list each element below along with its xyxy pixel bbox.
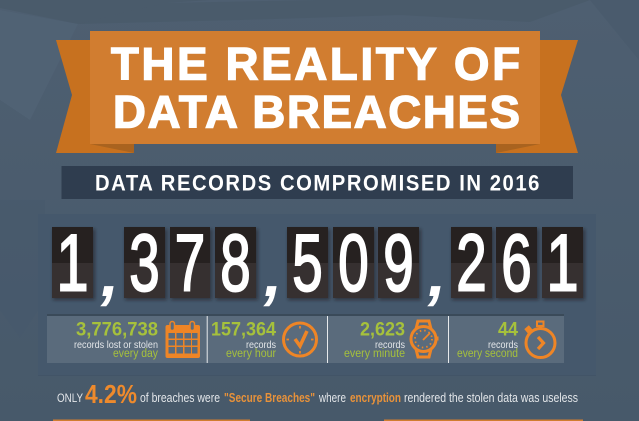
commas: ,	[100, 236, 119, 310]
subtitle bar	[62, 166, 573, 199]
bottom orange bars	[53, 420, 583, 421]
encryption statement: of breaches were	[140, 390, 220, 405]
stat: every second: 44	[498, 320, 518, 340]
digits: 1	[56, 218, 89, 308]
title	[111, 38, 520, 138]
stat: every minute: records	[375, 339, 405, 351]
stat: every second: records	[488, 339, 518, 351]
stat: every minute: every minute	[344, 348, 405, 360]
encryption statement: "Secure Breaches"	[224, 390, 315, 405]
subtitle bar: DATA RECORDS COMPROMISED IN 2016	[95, 172, 539, 196]
digit cards	[52, 227, 585, 300]
stat: every minute: 2,623	[360, 320, 405, 340]
stat: every minute	[344, 320, 405, 360]
digits: 5	[292, 218, 323, 308]
commas	[100, 236, 446, 310]
ribbon banner	[56, 31, 578, 153]
stat: every hour: 157,364	[211, 320, 276, 340]
icon: watch	[411, 321, 438, 357]
commas: ,	[263, 236, 282, 310]
encryption statement: ONLY	[57, 391, 83, 405]
digits: 6	[501, 218, 532, 308]
digits: 9	[383, 218, 414, 308]
icon: calendar	[166, 322, 200, 358]
encryption statement: rendered the stolen data was useless	[404, 390, 578, 405]
encryption statement: 4.2%	[85, 379, 137, 409]
stats band	[47, 314, 564, 363]
digits	[56, 218, 579, 308]
stat: every day: records lost or stolen	[74, 339, 158, 351]
stat: every second: every second	[457, 348, 518, 360]
icon: stopwatch	[524, 322, 555, 358]
digits: 3	[129, 218, 160, 308]
stat: every day: 3,776,738	[76, 320, 158, 340]
stat: every day	[74, 320, 158, 360]
stat: every hour: records	[246, 339, 276, 351]
encryption statement: where	[318, 390, 346, 405]
digits: 0	[338, 218, 369, 308]
digits: 1	[546, 218, 579, 308]
stat: every hour	[211, 320, 276, 360]
stat: every hour: every hour	[226, 348, 276, 360]
title: DATA BREACHES	[113, 86, 520, 138]
stat: every day: every day	[113, 348, 158, 360]
digits: 7	[175, 218, 205, 308]
commas: ,	[427, 236, 446, 310]
encryption statement: encryption	[350, 390, 401, 405]
flip counter: 1,378,509,261	[52, 218, 585, 310]
counter panel	[38, 214, 596, 376]
digits: 8	[220, 218, 251, 308]
icon: clock	[284, 323, 316, 356]
stat: every second	[457, 320, 518, 360]
title: THE REALITY OF	[111, 38, 520, 90]
digits: 2	[456, 218, 487, 308]
encryption statement	[57, 379, 578, 409]
